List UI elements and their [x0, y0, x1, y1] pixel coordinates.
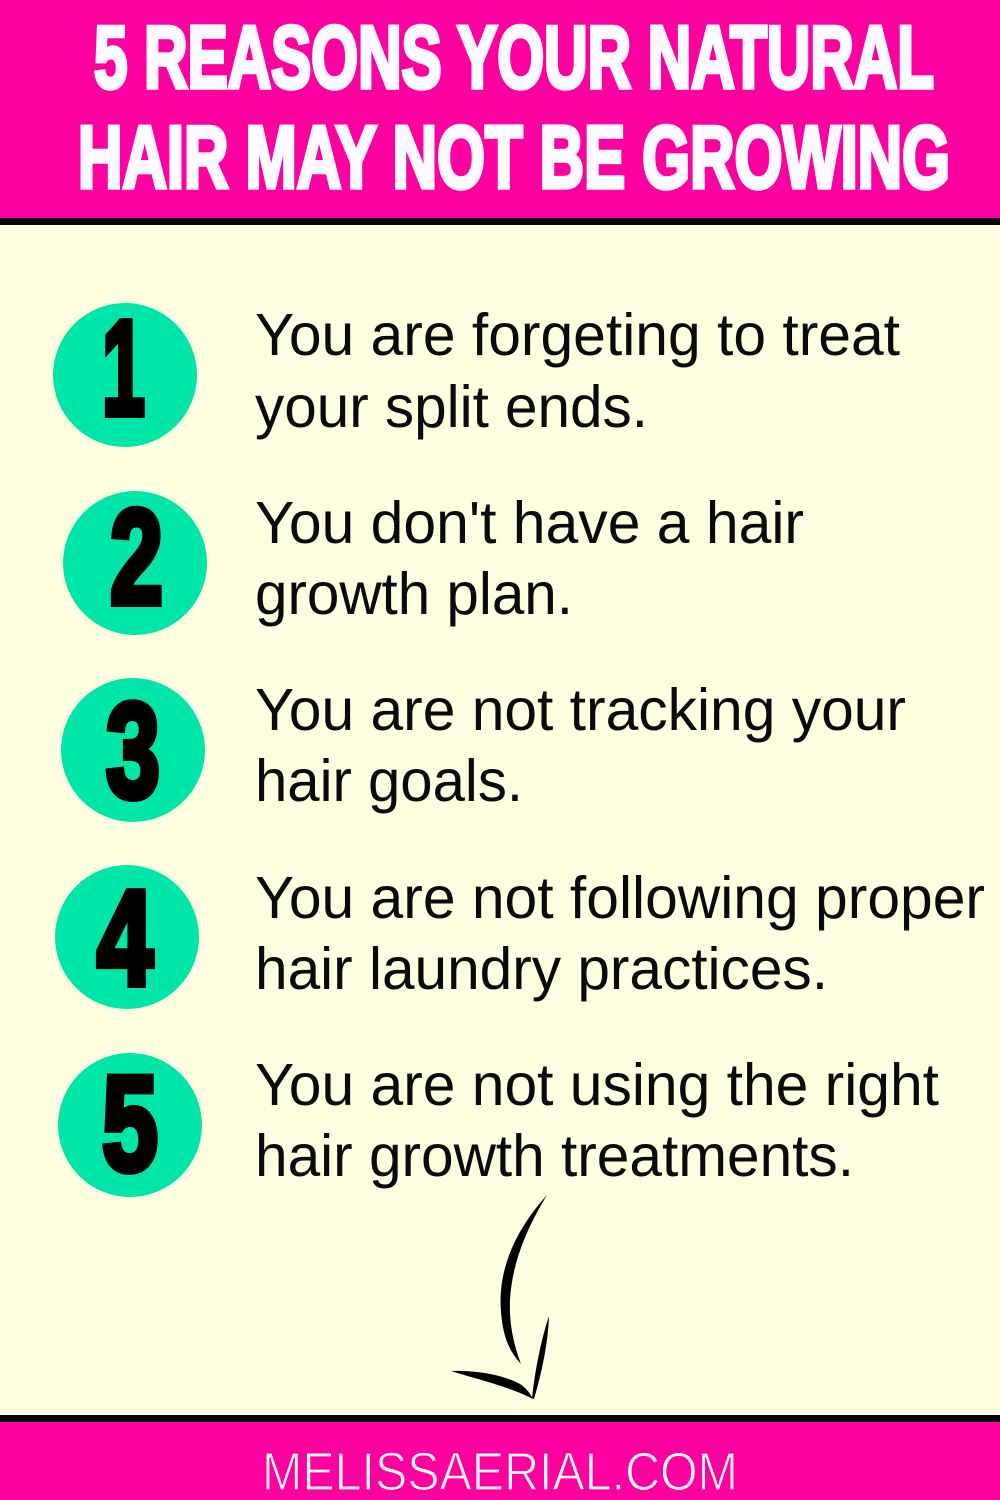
item 4 [55, 862, 985, 1014]
number badge 2 [63, 482, 207, 635]
number badge 4 [55, 862, 199, 1014]
reason 3 text: You are not tracking your [255, 676, 906, 743]
item 5 [58, 1048, 940, 1199]
number badge 3: 3 [106, 675, 160, 826]
reason 3 text [255, 676, 906, 814]
reason 2 text [255, 489, 804, 627]
number badge 4: 4 [97, 862, 153, 1014]
arrow pointing down [451, 1195, 549, 1399]
number badge 2: 2 [110, 482, 163, 632]
footer banner [0, 1415, 1000, 1500]
number badge 5: 5 [102, 1048, 158, 1199]
item 3 [61, 675, 906, 826]
reason 4 text: You are not following proper [255, 864, 985, 931]
number badge 1: 1 [102, 292, 145, 444]
header banner [0, 0, 1000, 225]
title [78, 8, 950, 206]
reason 4 text [255, 864, 985, 1002]
reason 2 text: growth plan. [255, 560, 573, 627]
item 2 [63, 482, 804, 635]
reason 5 text: hair growth treatments. [255, 1122, 854, 1189]
reason 5 text [255, 1051, 940, 1189]
reason 2 text: You don't have a hair [255, 489, 804, 556]
number badge 5 [58, 1048, 202, 1199]
reason 1 text: your split ends. [255, 373, 648, 440]
reason 4 text: hair laundry practices. [255, 935, 828, 1002]
reason 1 text: You are forgeting to treat [255, 301, 901, 368]
item 1 [53, 292, 901, 447]
reason 1 text [255, 301, 901, 440]
reason 3 text: hair goals. [255, 747, 523, 814]
reason 5 text: You are not using the right [255, 1051, 940, 1118]
number badge 1 [53, 292, 197, 447]
number badge 3 [61, 675, 205, 826]
